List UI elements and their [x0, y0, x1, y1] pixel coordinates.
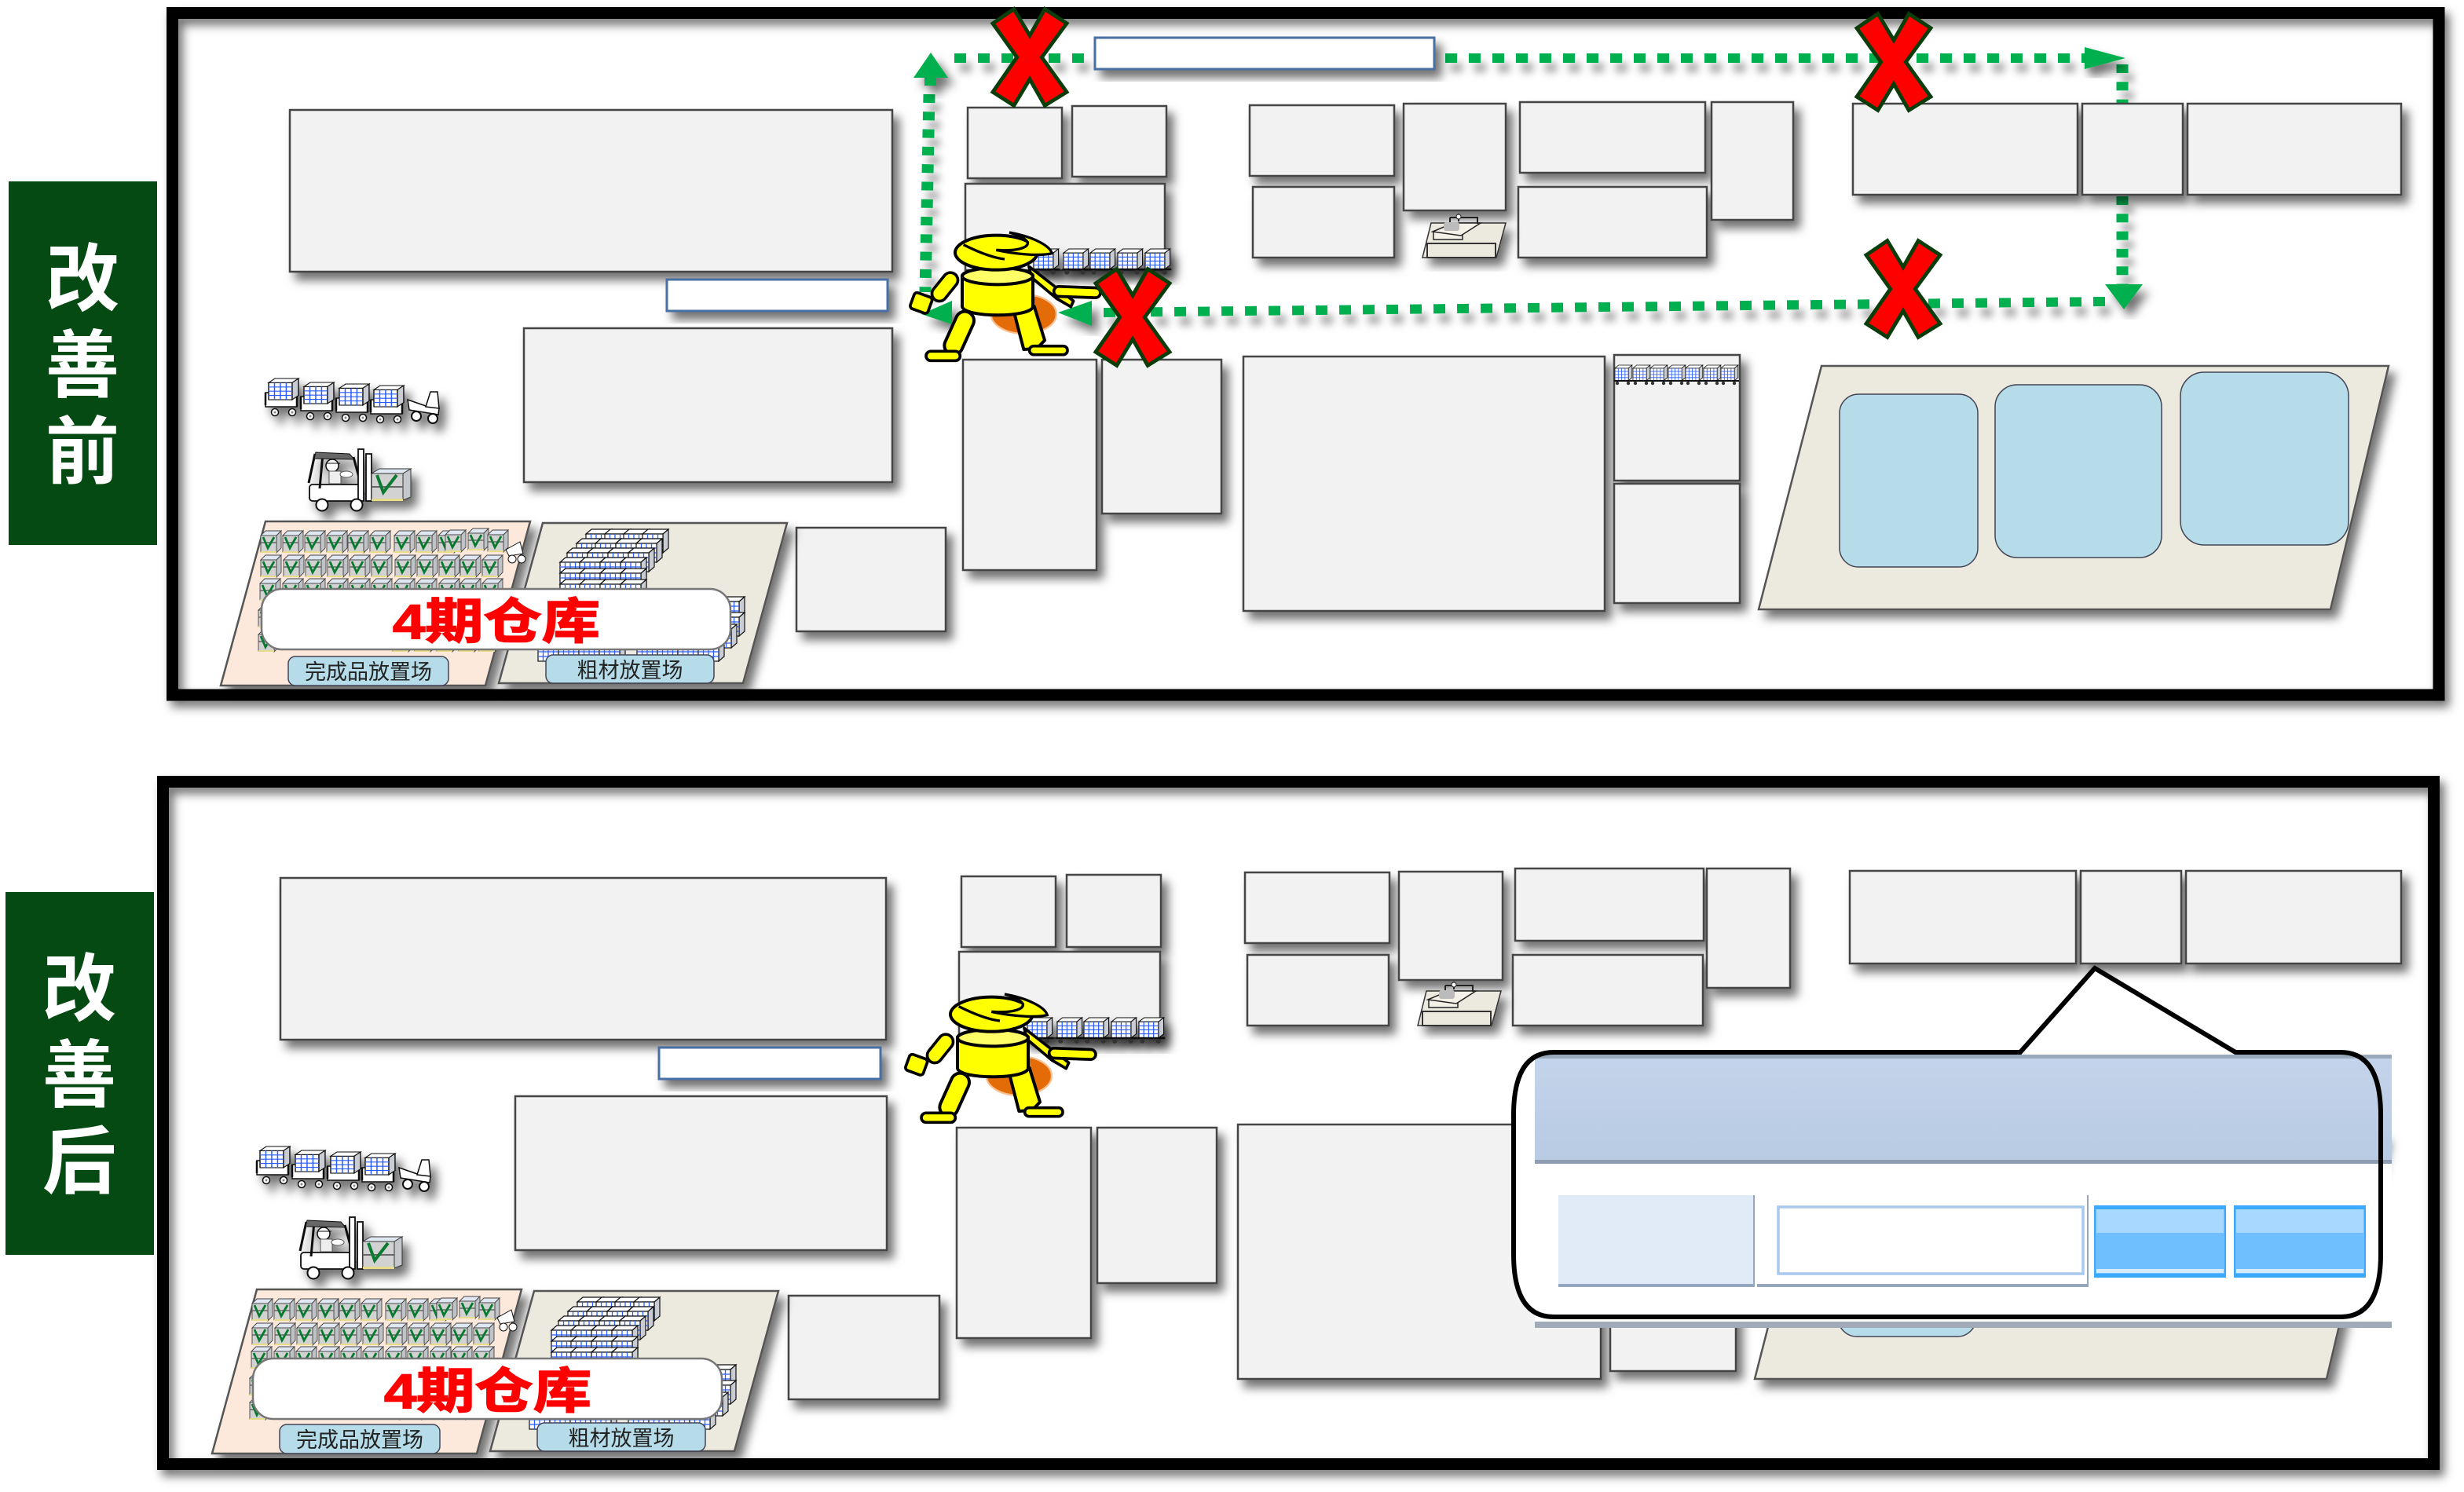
icon: forklift	[300, 1217, 402, 1278]
tag: finished goods	[280, 1424, 440, 1454]
equipment blocks: center	[963, 38, 1793, 611]
zone: raw material area	[490, 1291, 778, 1451]
label: before improvement	[9, 181, 157, 545]
screenshot: button one	[2095, 1206, 2225, 1277]
icon: tugger train	[265, 378, 439, 423]
label: after improvement: 善	[42, 1034, 116, 1117]
label: after improvement: 改	[42, 948, 116, 1030]
icon: forklift	[309, 449, 411, 510]
icon: worker	[905, 994, 1096, 1122]
zone: tank area with three tanks	[1759, 366, 2389, 609]
tag: finished goods: 完成品放置场	[296, 1428, 423, 1452]
label: after improvement	[5, 892, 154, 1255]
tag: raw material: 粗材放置场	[569, 1427, 674, 1450]
icon: machine on stand	[1422, 214, 1506, 258]
screenshot: input field	[1757, 1195, 2089, 1287]
label: before improvement: 善	[46, 324, 119, 407]
equipment blocks: right	[1614, 104, 2401, 603]
label: before improvement: 前	[46, 411, 119, 493]
icon: tugger train	[257, 1146, 430, 1191]
label: warehouse 4	[253, 1359, 722, 1419]
tag: finished goods: 完成品放置场	[305, 660, 432, 684]
equipment blocks: left	[290, 110, 946, 631]
tag: raw material: 粗材放置场	[577, 659, 683, 682]
label: warehouse 4: 4期仓库	[393, 595, 600, 649]
route: green dotted flow path	[913, 47, 2143, 324]
zone: tank area partly hidden	[1755, 1134, 2385, 1379]
zone: finished goods area	[221, 521, 530, 686]
icon: trolley row behind worker	[1033, 249, 1171, 275]
zone: finished goods area	[212, 1289, 522, 1454]
icon: trolley row on rack	[1614, 365, 1739, 385]
icon: trolley row behind worker	[1027, 1018, 1165, 1044]
screenshot: label cell	[1558, 1195, 1755, 1287]
tag: finished goods	[288, 656, 448, 686]
panel: after improvement	[5, 782, 2433, 1464]
frame: before layout	[173, 13, 2439, 695]
icon: machine on stand	[1418, 982, 1501, 1026]
equipment blocks: center	[957, 869, 1790, 1379]
label: warehouse 4	[262, 589, 730, 649]
icon: worker	[910, 232, 1100, 360]
equipment blocks: right	[1610, 871, 2401, 1371]
screenshot: header bar	[1535, 1055, 2392, 1328]
icon: red X marks	[993, 9, 1940, 365]
tag: raw material	[546, 655, 714, 683]
label: before improvement: 改	[46, 238, 119, 320]
zone: raw material area	[499, 523, 787, 683]
panel: before improvement	[9, 9, 2439, 695]
frame: after layout	[163, 782, 2433, 1464]
label: warehouse 4: 4期仓库	[384, 1365, 591, 1419]
equipment blocks: left	[280, 878, 939, 1399]
tag: raw material	[537, 1423, 705, 1451]
label: after improvement: 后	[42, 1121, 116, 1203]
screenshot: button two	[2235, 1206, 2365, 1277]
callout: screen interface	[1514, 968, 2392, 1328]
